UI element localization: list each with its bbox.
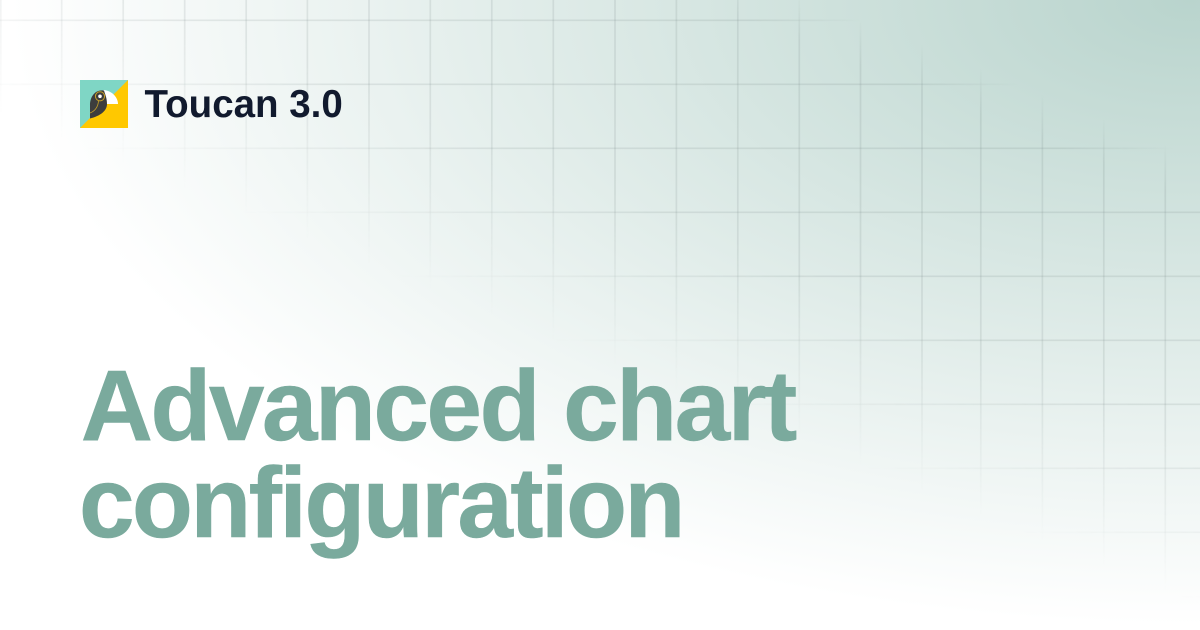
title: configuration [79, 446, 683, 558]
icon: Toucan logo [80, 80, 128, 128]
brand name: Toucan 3.0 [144, 82, 343, 126]
title: Advanced chart [81, 350, 795, 462]
title [79, 350, 796, 559]
